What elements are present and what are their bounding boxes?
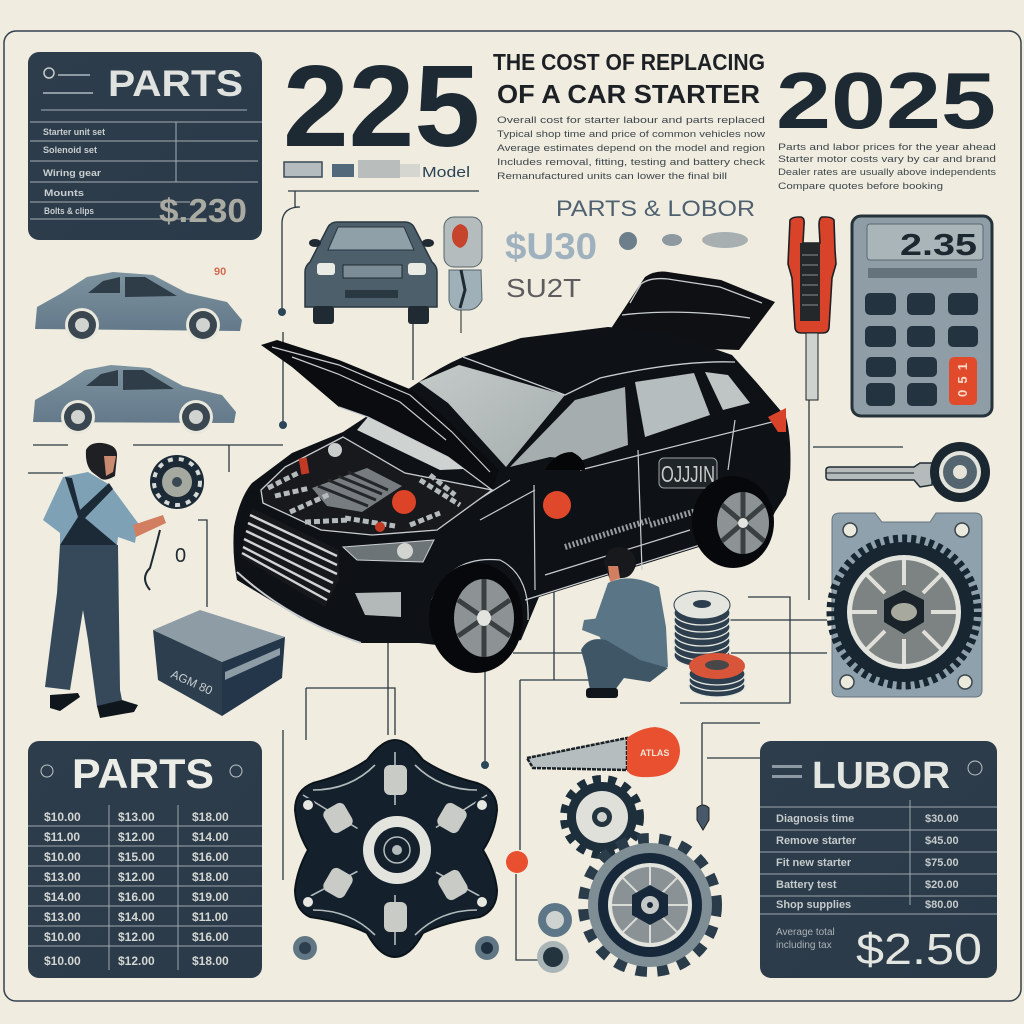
lower glass under hood [357,417,486,470]
panel: parts table bottom left: $18.00 [192,870,229,884]
illustration: standing mechanic [43,443,204,718]
panel: parts summary top left: Wiring gear [43,168,102,178]
panel: parts table bottom left: $18.00 [192,954,229,968]
panel: labor bottom right: $80.00 [925,899,959,911]
illustration: battery: AGM 80 [169,667,215,698]
panel: parts table bottom left: $16.00 [192,850,229,864]
icon: small bearing right [475,936,499,960]
illustration: calculator [852,216,992,416]
caption strip under year [284,160,470,181]
panel: labor bottom right: Fit new starter [776,857,852,869]
panel: labor bottom right: Shop supplies [776,899,851,911]
panel: parts summary top left: Solenoid set [43,145,97,155]
panel: parts table bottom left: $14.00 [44,890,81,904]
rear wheel [692,476,774,568]
text block: center description [497,115,765,182]
panel: parts table bottom left: $18.00 [192,810,229,824]
text block: center description: Remanufactured units can lower the final bill [497,171,727,182]
panel: parts table bottom left: $16.00 [118,890,155,904]
panel: parts table bottom left: $19.00 [192,890,229,904]
trousers [45,545,122,707]
icon: red marker [506,851,528,873]
illustration: red handled saw [527,727,680,777]
price smudge [505,226,748,303]
text block: center description: Average estimates depend on the model and region [497,143,765,154]
shirt [43,472,138,545]
body lines and doors [430,420,780,600]
panel: parts table bottom left: $13.00 [44,870,81,884]
panel: labor bottom right: Diagnosis time [776,813,854,825]
text block: center description: Overall cost for starter labour and parts replaced [497,115,765,126]
panel: labor bottom right: Remove starter [776,835,857,847]
caption strip under year: Model [422,164,470,181]
illustration: calculator: 051 [955,363,970,397]
panel: labor bottom right: $45.00 [925,835,959,847]
panel: parts table bottom left: $10.00 [44,810,81,824]
front wheel [429,560,528,673]
panel: parts table bottom left: $12.00 [118,930,155,944]
icons: small bearings [537,903,572,973]
illustration: large gear [585,840,715,970]
panel: parts table bottom left: $11.00 [44,830,80,844]
panel: parts table bottom left: $13.00 [118,810,155,824]
panel: parts table bottom left: $13.00 [44,910,81,924]
small tag: 90 [214,266,226,278]
roof line [463,357,735,395]
heading: parts: PARTS [108,63,243,104]
door text dots [565,500,732,547]
panel: parts table bottom left: $10.00 [44,850,81,864]
grille [237,508,361,643]
illustration: sedan bottom [33,365,236,434]
illustration: main SUV [233,272,790,673]
panel: parts summary top left [28,52,262,240]
red door circle [543,491,571,519]
illustration: red handled saw: ATLAS [640,748,669,758]
icon: key fob [444,217,482,333]
panel: parts summary top left: $.230 [159,192,247,229]
title: of a car starter: OF A CAR STARTER [497,79,760,109]
heading: parts bottom: PARTS [72,750,214,797]
text block: right description: Compare quotes before booking [778,181,943,192]
illustration: stack of discs [674,591,745,697]
text block: right description: Parts and labor prices for the year ahead [778,142,996,153]
display digits: 2.35 [900,227,977,262]
headlight [343,540,434,562]
connector lines [28,191,903,960]
icon: plumb bob [697,805,709,830]
fog lamp [355,592,401,617]
shoes [50,693,138,718]
door badge: OJJJIN [661,461,715,487]
panel: parts table bottom left: $16.00 [192,930,229,944]
panel: parts table bottom left: $12.00 [118,954,155,968]
price smudge: $U30 [505,226,597,267]
title: big year left: 225 [283,41,480,171]
text block: center description: Includes removal, fitting, testing and battery check [497,157,765,168]
panel: parts table bottom left: $10.00 [44,954,81,968]
panel: parts table bottom left: $12.00 [118,830,155,844]
panel: labor bottom right [760,741,997,978]
body [233,327,790,650]
panel: parts table bottom left: $12.00 [118,870,155,884]
open tailgate [600,272,775,350]
illustration: crouching mechanic [581,547,668,698]
icon: small bearing left [293,936,317,960]
mirror [545,452,585,470]
panel: parts summary top left: Starter unit set [43,127,105,137]
rear light [768,408,786,432]
illustration: starter gear assembly right [831,513,982,697]
illustration: small SUV front [305,222,437,324]
heading: labor: LUBOR [812,755,950,797]
panel: parts summary top left: Bolts & clips [44,206,94,216]
panel: parts table bottom left: $14.00 [118,910,155,924]
illustration: black flywheel [295,740,497,957]
heading: parts and labor: PARTS & LOBOR [556,196,755,221]
panel: parts summary top left: Mounts [44,188,84,198]
panel: labor bottom right: including tax [776,940,832,951]
overall straps and bib [60,477,117,545]
text block: right description: Starter motor costs vary by car and brand [778,154,996,165]
illustration: small gear [565,780,639,854]
panel: labor bottom right: Battery test [776,879,837,891]
text block: center description: Typical shop time and price of common vehicles now [497,129,765,140]
illustration: battery [153,610,285,716]
text block: right description [778,142,996,192]
panel: labor bottom right: $2.50 [856,925,982,974]
head [86,443,117,480]
panel: labor bottom right: $20.00 [925,879,959,891]
icon: wrench key right [826,442,990,502]
small zero mark: 0 [175,545,186,567]
side windows [510,387,628,467]
panel: parts table bottom left: $11.00 [192,910,228,924]
windshield [419,365,565,467]
engine bay [261,437,492,535]
hand gear [150,455,204,509]
open hood [261,340,499,490]
illustration: screwdriver tool [788,217,836,400]
panel: parts table bottom left [28,741,262,978]
panel: parts table bottom left: $10.00 [44,930,81,944]
panel: labor bottom right: $75.00 [925,857,959,869]
illustration: sedan top [35,272,242,342]
price smudge: SU2T [506,273,581,303]
panel: labor bottom right: Average total [776,927,835,938]
text block: right description: Dealer rates are usually above independents [778,167,996,178]
title: the cost of replacing: THE COST OF REPLACING [493,49,765,75]
forearm [133,515,166,537]
panel: labor bottom right: $30.00 [925,813,959,825]
panel: parts table bottom left: $15.00 [118,850,155,864]
panel: parts table bottom left: $14.00 [192,830,229,844]
door badge [659,458,717,488]
title: big year right: 2025 [776,56,996,145]
